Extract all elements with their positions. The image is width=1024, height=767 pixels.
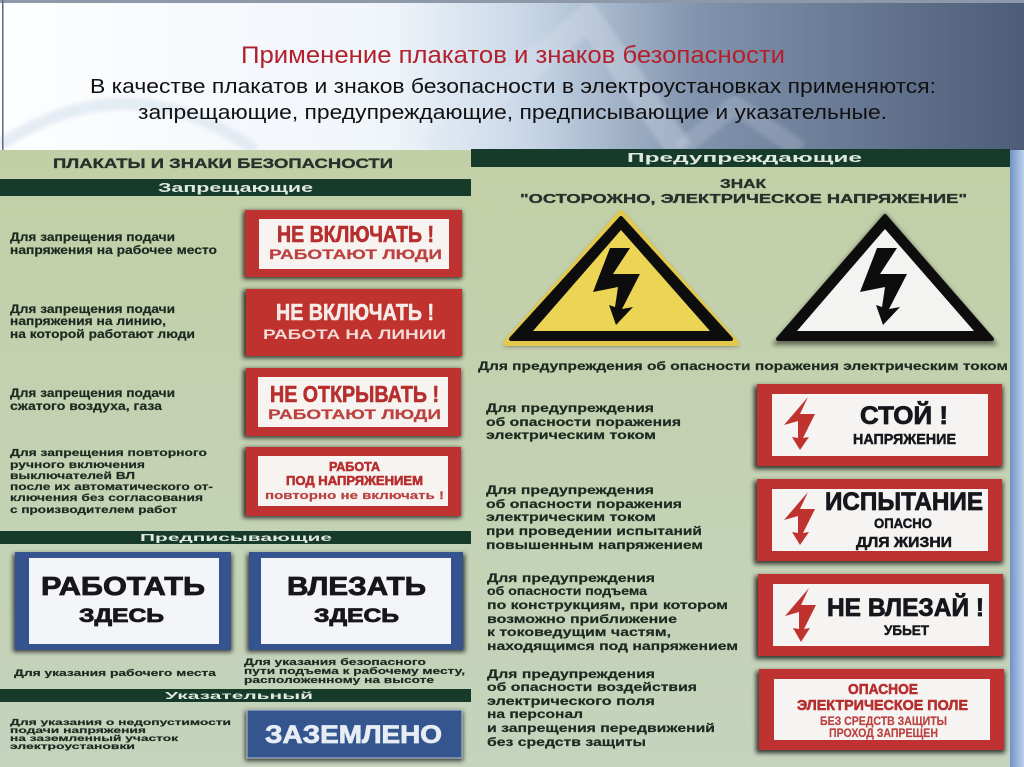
sign: grounded <box>245 710 463 761</box>
description: repeated switch-on: выключателей ВЛ <box>10 470 135 482</box>
sign: work under voltage: РАБОТА <box>329 459 381 474</box>
description: working people: напряжения на рабочее место <box>10 245 217 257</box>
section bar: prohibiting: Запрещающие <box>158 181 313 195</box>
description: grounded <box>10 717 231 751</box>
heading: caution sign <box>520 177 967 206</box>
sign: stop, voltage: НАПРЯЖЕНИЕ <box>853 431 956 448</box>
description: stop <box>486 403 681 442</box>
caption: safe climbing path: пути подъема к рабочему месту, <box>244 666 465 677</box>
description: working people: Для запрещения подачи <box>10 232 175 244</box>
description: climbing <box>487 573 738 653</box>
sign: work under voltage: повторно не включать ! <box>265 490 444 502</box>
sign: work here <box>13 552 232 652</box>
sign: climb here: ВЛЕЗАТЬ <box>287 571 426 601</box>
caption: safe climbing path: расположенному на высоте <box>244 675 434 686</box>
description: compressed air <box>10 388 175 413</box>
panel: warning signs, right <box>471 149 1010 767</box>
sign: do not climb: НЕ ВЛЕЗАЙ ! <box>827 592 984 622</box>
caption: safe climbing path <box>244 657 465 686</box>
description: compressed air: сжатого воздуха, газа <box>10 401 163 413</box>
description: electric field: электрического поля <box>487 696 655 708</box>
sign: testing, danger to life <box>754 479 1003 564</box>
section bar: mandatory <box>0 531 471 544</box>
section bar: warning: Предупреждающие <box>627 151 862 165</box>
intro text <box>90 75 936 124</box>
intro text: В качестве плакатов и знаков безопасности в электроустановках применяются: <box>90 75 936 98</box>
panel: posters and signs, left <box>0 150 471 767</box>
description: grounded: на заземленный участок <box>10 733 179 743</box>
sign: work here: РАБОТАТЬ <box>41 571 205 601</box>
description: repeated switch-on: после их автоматического от- <box>10 481 214 493</box>
sign: climb here <box>247 552 465 652</box>
description: working people <box>10 232 217 257</box>
description: stop: Для предупреждения <box>486 403 654 415</box>
sign: do not switch on, people working: РАБОТАЮТ ЛЮДИ <box>269 247 442 262</box>
description: stop: об опасности поражения <box>486 417 681 429</box>
sign: dangerous electric field: ЭЛЕКТРИЧЕСКОЕ ПОЛЕ <box>797 697 968 714</box>
caption: work place: Для указания рабочего места <box>14 668 217 679</box>
sign: grounded: ЗАЗЕМЛЕНО <box>265 721 442 749</box>
description: grounded: подачи напряжения <box>10 725 146 735</box>
sign: dangerous electric field <box>756 669 1005 753</box>
description: line: Для запрещения подачи <box>10 304 175 316</box>
description: grounded: Для указания о недопустимости <box>10 717 231 727</box>
description: grounded: электроустановки <box>10 741 135 751</box>
description: line: напряжения на линию, <box>10 316 166 328</box>
description: climbing: находящимся под напряжением <box>487 641 738 653</box>
description: climbing: Для предупреждения <box>487 573 655 585</box>
sign: work here: ЗДЕСЬ <box>79 606 164 627</box>
title: Применение плакатов и знаков безопасности <box>241 42 785 69</box>
sign: do not switch on, line work <box>243 289 462 358</box>
section bar: warning <box>471 149 1010 167</box>
description: repeated switch-on: ручного включения <box>10 459 145 471</box>
sign: do not switch on, line work: РАБОТА НА ЛИНИИ <box>263 327 446 342</box>
sign: work under voltage <box>243 447 461 518</box>
description: compressed air: Для запрещения подачи <box>10 388 175 400</box>
sign: do not open <box>243 368 461 438</box>
description: testing: при проведении испытаний <box>486 526 702 538</box>
sign: do not climb <box>755 574 1004 659</box>
description: climbing: к токоведущим частям, <box>487 627 671 639</box>
description: testing: повышенным напряжением <box>486 540 703 552</box>
sign: do not open: НЕ ОТКРЫВАТЬ ! <box>270 381 439 407</box>
sign: stop, voltage: СТОЙ ! <box>860 400 948 430</box>
description: line: на которой работают люди <box>10 329 195 341</box>
description: testing: электрическим током <box>486 512 656 524</box>
panel heading: ПЛАКАТЫ И ЗНАКИ БЕЗОПАСНОСТИ <box>53 156 393 171</box>
sign: work under voltage: ПОД НАПРЯЖЕНИЕМ <box>286 473 423 488</box>
description: climbing: об опасности подъема <box>487 586 648 598</box>
description: testing <box>486 485 703 552</box>
heading: caution sign: ЗНАК <box>720 177 767 191</box>
section bar: indicating: Указательный <box>165 690 313 702</box>
sign: dangerous electric field: ОПАСНОЕ <box>848 681 918 698</box>
sign: climb here: ЗДЕСЬ <box>314 606 399 627</box>
icon: white warning triangle <box>772 213 998 345</box>
sign: testing, danger to life: ИСПЫТАНИЕ <box>825 488 983 516</box>
sign: testing, danger to life: ДЛЯ ЖИЗНИ <box>856 534 952 551</box>
description: climbing: возможно приближение <box>487 614 677 626</box>
sign: do not switch on, people working: НЕ ВКЛЮЧАТЬ ! <box>277 221 434 247</box>
icon: yellow warning triangle <box>503 212 739 346</box>
description: testing: Для предупреждения <box>486 485 654 497</box>
sign: do not switch on, people working <box>243 210 462 279</box>
description: line <box>10 304 195 341</box>
description: electric field: об опасности воздействия <box>487 682 697 694</box>
description: repeated switch-on <box>10 447 214 516</box>
description: electric field: без средств защиты <box>487 737 646 749</box>
description: repeated switch-on: с производителем работ <box>10 504 177 516</box>
sign: do not climb: УБЬЕТ <box>884 622 929 638</box>
description: electric field: Для предупреждения <box>487 669 655 681</box>
intro text: запрещающие, предупреждающие, предписывающие и указательные. <box>138 101 887 124</box>
description: repeated switch-on: ключения без согласования <box>10 492 203 504</box>
description: climbing: по конструкциям, при котором <box>487 600 728 612</box>
description: electric field: и запрещения передвижений <box>487 723 715 735</box>
description: electric field <box>487 669 715 749</box>
sign: stop, voltage <box>754 384 1003 469</box>
sign: dangerous electric field: ПРОХОД ЗАПРЕЩЕН <box>829 726 938 740</box>
description: testing: об опасности поражения <box>486 499 682 511</box>
sign: do not open: РАБОТАЮТ ЛЮДИ <box>268 407 441 422</box>
heading: caution sign: "ОСТОРОЖНО, ЭЛЕКТРИЧЕСКОЕ НАПРЯЖЕНИЕ" <box>520 192 967 206</box>
section bar: mandatory: Предписывающие <box>140 532 332 544</box>
section bar: prohibiting <box>0 179 471 196</box>
caption: safe climbing path: Для указания безопасного <box>244 657 426 668</box>
description: repeated switch-on: Для запрещения повторного <box>10 447 207 459</box>
sign: do not switch on, line work: НЕ ВКЛЮЧАТЬ ! <box>276 299 434 325</box>
sign: testing, danger to life: ОПАСНО <box>874 515 932 531</box>
description: stop: электрическим током <box>486 430 656 442</box>
caption: electric shock warning: Для предупреждения об опасности поражения электрическим током <box>478 361 1008 373</box>
sign: dangerous electric field: БЕЗ СРЕДСТВ ЗАЩИТЫ <box>820 714 947 728</box>
section bar: indicating <box>0 689 471 702</box>
description: electric field: на персонал <box>487 709 583 721</box>
